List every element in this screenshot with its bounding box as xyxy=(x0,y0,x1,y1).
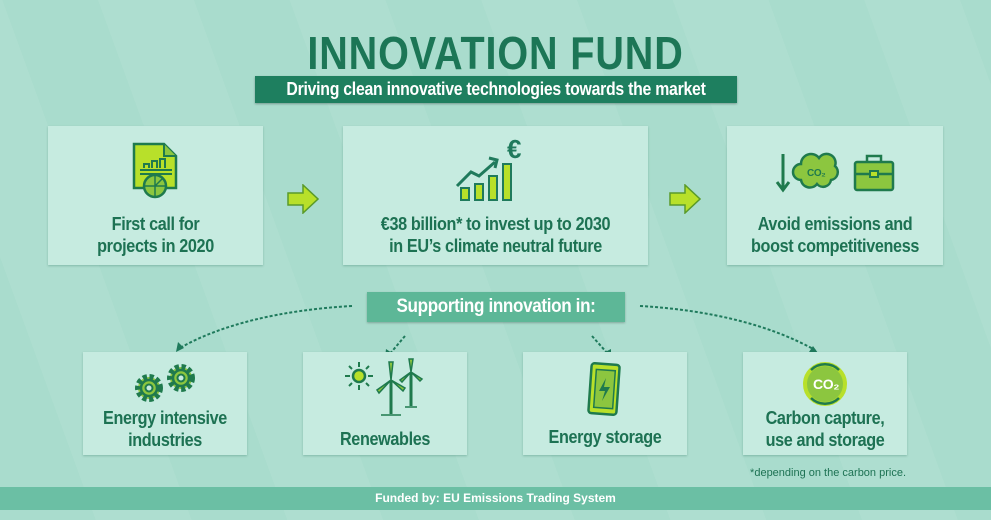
text: use and storage xyxy=(766,430,884,450)
panel: carbon capture xyxy=(743,352,907,455)
panel: energy intensive xyxy=(83,352,247,455)
title: INNOVATION FUND xyxy=(307,27,684,79)
icon: co2 and briefcase: CO₂ xyxy=(807,168,825,179)
arrow 1 xyxy=(287,184,319,214)
panel: energy storage xyxy=(523,352,687,455)
text: €38 billion* to invest up to 2030 xyxy=(381,214,610,234)
panel: avoid emissions xyxy=(727,126,943,265)
footer bar: Funded by: EU Emissions Trading System xyxy=(375,491,616,505)
text: Renewables xyxy=(340,429,430,449)
text: projects in 2020 xyxy=(97,236,214,256)
icon: gears xyxy=(135,364,195,402)
text: in EU’s climate neutral future xyxy=(389,236,602,256)
text: Energy intensive xyxy=(103,408,227,428)
text xyxy=(766,408,884,450)
dashed arrows xyxy=(176,305,818,352)
footnote: *depending on the carbon price. xyxy=(750,467,906,479)
arrow 2 xyxy=(669,184,701,214)
text xyxy=(380,214,610,256)
text xyxy=(751,214,919,256)
icon: sun and turbines xyxy=(345,358,424,416)
text: Energy storage xyxy=(549,427,661,447)
text: boost competitiveness xyxy=(751,236,919,256)
subtitle bar xyxy=(255,76,737,103)
panel: first call xyxy=(48,126,263,265)
icon: co2 cycle: CO₂ xyxy=(813,376,839,392)
text xyxy=(103,408,227,450)
panel: renewables xyxy=(303,352,467,455)
supporting box xyxy=(367,292,625,322)
supporting box: Supporting innovation in: xyxy=(396,296,596,317)
text xyxy=(97,214,214,256)
icon: co2 cycle xyxy=(803,362,847,406)
text: Carbon capture, xyxy=(766,408,884,428)
panel: budget xyxy=(343,126,648,265)
icon: battery phone xyxy=(587,362,621,416)
icon: co2 and briefcase xyxy=(776,152,894,192)
icon: chart euro xyxy=(456,136,521,201)
subtitle bar: Driving clean innovative technologies towards the market xyxy=(286,79,706,99)
icon: document xyxy=(132,142,178,198)
text: industries xyxy=(128,430,202,450)
text: First call for xyxy=(112,214,199,234)
text: Avoid emissions and xyxy=(758,214,912,234)
footer bar xyxy=(0,487,991,510)
